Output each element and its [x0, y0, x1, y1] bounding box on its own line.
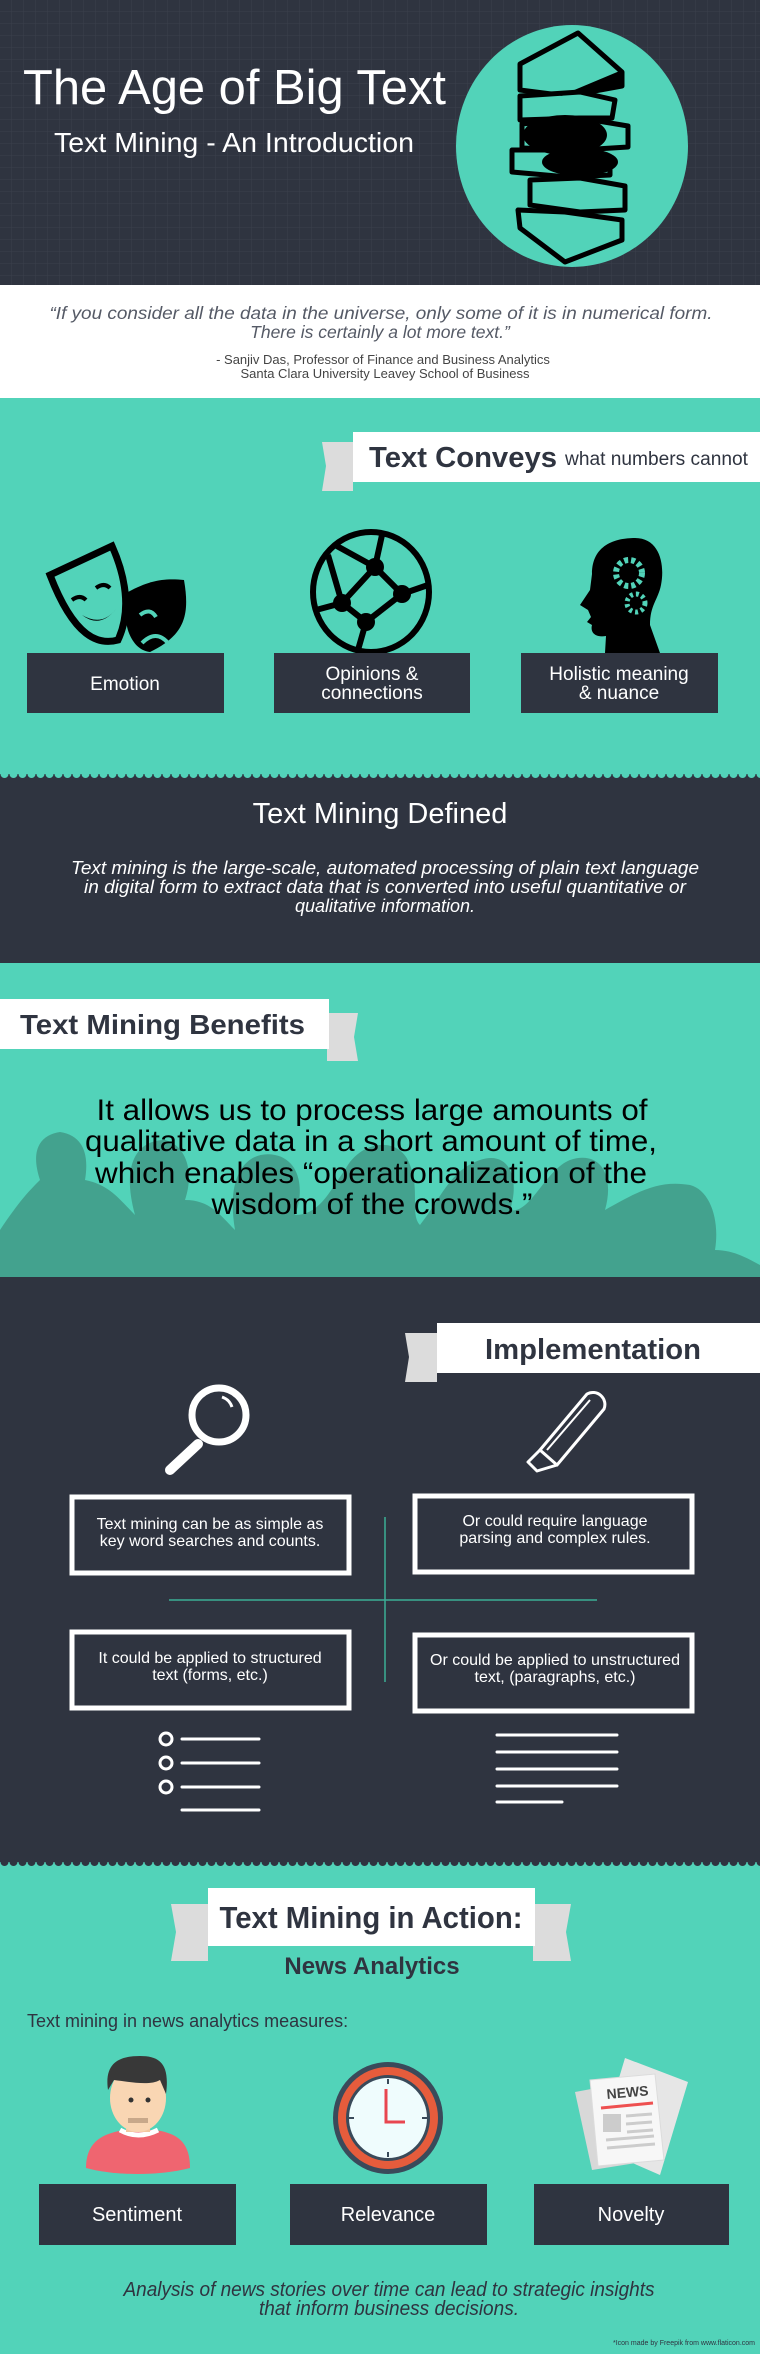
box: novelty: Novelty	[598, 2204, 664, 2226]
panel: benefits	[0, 963, 760, 1277]
icon: magnifier	[170, 1388, 246, 1470]
credit: *Icon made by Freepik from www.flaticon.com	[613, 2340, 755, 2347]
attribution	[216, 352, 550, 381]
benefits text: qualitative data in a short amount of time,	[85, 1125, 657, 1158]
box: simple: Text mining can be as simple as	[97, 1516, 323, 1533]
box: sentiment: Sentiment	[92, 2204, 182, 2226]
banner: text conveys: Text Conveys	[369, 442, 557, 474]
conclusion text: Analysis of news stories over time can lead to strategic insights	[123, 2279, 654, 2301]
box: holistic: & nuance	[579, 683, 659, 704]
attribution: Santa Clara University Leavey School of Business	[240, 366, 530, 381]
panel: text mining defined	[0, 769, 760, 963]
box: novelty	[534, 2184, 729, 2245]
quote text	[50, 303, 712, 342]
icon: paragraph	[497, 1735, 617, 1802]
banner: text conveys: what numbers cannot	[564, 449, 749, 470]
benefits text: wisdom of the crowds.”	[210, 1188, 532, 1221]
box: complex: Or could require language	[462, 1513, 648, 1530]
icon: person	[86, 2056, 190, 2174]
benefits text	[85, 1094, 657, 1221]
quote text: “If you consider all the data in the universe, only some of it is in numerical form.	[50, 303, 712, 323]
banner: implementation	[405, 1323, 760, 1382]
benefits text: It allows us to process large amounts of	[96, 1094, 648, 1127]
header background	[0, 0, 760, 285]
box: complex: parsing and complex rules.	[459, 1530, 651, 1547]
definition text	[71, 858, 699, 916]
banner: in action: Text Mining in Action:	[220, 1900, 522, 1935]
box: relevance	[290, 2184, 487, 2245]
definition text: in digital form to extract data that is converted into useful quantitative or	[84, 877, 687, 897]
heading: defined: Text Mining Defined	[253, 798, 507, 830]
crowd silhouette	[0, 1132, 760, 1277]
icon: list	[160, 1733, 259, 1810]
box: emotion: Emotion	[90, 674, 160, 695]
benefits text: which enables “operationalization of the	[94, 1157, 647, 1190]
conclusion text	[123, 2279, 654, 2320]
icon: theater masks	[50, 546, 186, 652]
box: sentiment	[39, 2184, 236, 2245]
cross lines	[169, 1517, 597, 1682]
box: holistic: Holistic meaning	[549, 664, 689, 685]
box: structured: It could be applied to structured	[98, 1650, 322, 1667]
icon: head with gears	[580, 538, 662, 653]
banner: text conveys	[322, 432, 760, 491]
box: unstructured	[415, 1635, 692, 1711]
icon: highlighter	[528, 1392, 605, 1471]
box: simple	[72, 1497, 349, 1573]
box: simple: key word searches and counts.	[100, 1533, 320, 1550]
box: emotion	[27, 653, 224, 713]
box: opinions	[274, 653, 470, 713]
icon: newspaper: NEWS	[606, 2082, 649, 2102]
icon: books in circle	[456, 25, 688, 267]
box: structured	[72, 1632, 349, 1708]
banner: in action	[171, 1888, 571, 1961]
banner: implementation: Implementation	[485, 1334, 701, 1366]
conclusion text: that inform business decisions.	[259, 2298, 519, 2320]
attribution: - Sanjiv Das, Professor of Finance and Business Analytics	[216, 352, 550, 367]
definition text: Text mining is the large-scale, automated processing of plain text language	[71, 858, 699, 878]
subheading: news analytics: News Analytics	[284, 1953, 460, 1980]
box: structured: text (forms, etc.)	[152, 1667, 268, 1684]
panel: text mining in action	[0, 1857, 760, 2354]
icon: newspaper	[575, 2058, 688, 2175]
box: opinions: Opinions &	[326, 664, 419, 685]
box: unstructured: Or could be applied to unstructured	[430, 1652, 680, 1669]
panel: implementation	[0, 1277, 760, 1862]
box: relevance: Relevance	[341, 2204, 435, 2226]
quote panel	[0, 285, 760, 398]
box: opinions: connections	[321, 683, 423, 704]
banner: benefits: Text Mining Benefits	[20, 1009, 305, 1040]
icon: clock	[333, 2062, 443, 2174]
box: holistic	[521, 653, 718, 713]
box: unstructured: text, (paragraphs, etc.)	[475, 1669, 635, 1686]
icon: network globe	[313, 532, 429, 652]
quote text: There is certainly a lot more text.”	[250, 322, 511, 342]
definition text: qualitative information.	[295, 896, 475, 916]
subtitle: Text Mining - An Introduction	[54, 127, 414, 158]
banner: benefits	[0, 999, 358, 1061]
title: The Age of Big Text	[23, 61, 446, 115]
panel: text conveys	[0, 398, 760, 774]
box: complex	[415, 1496, 692, 1572]
intro text: Text mining in news analytics measures:	[27, 2011, 348, 2031]
